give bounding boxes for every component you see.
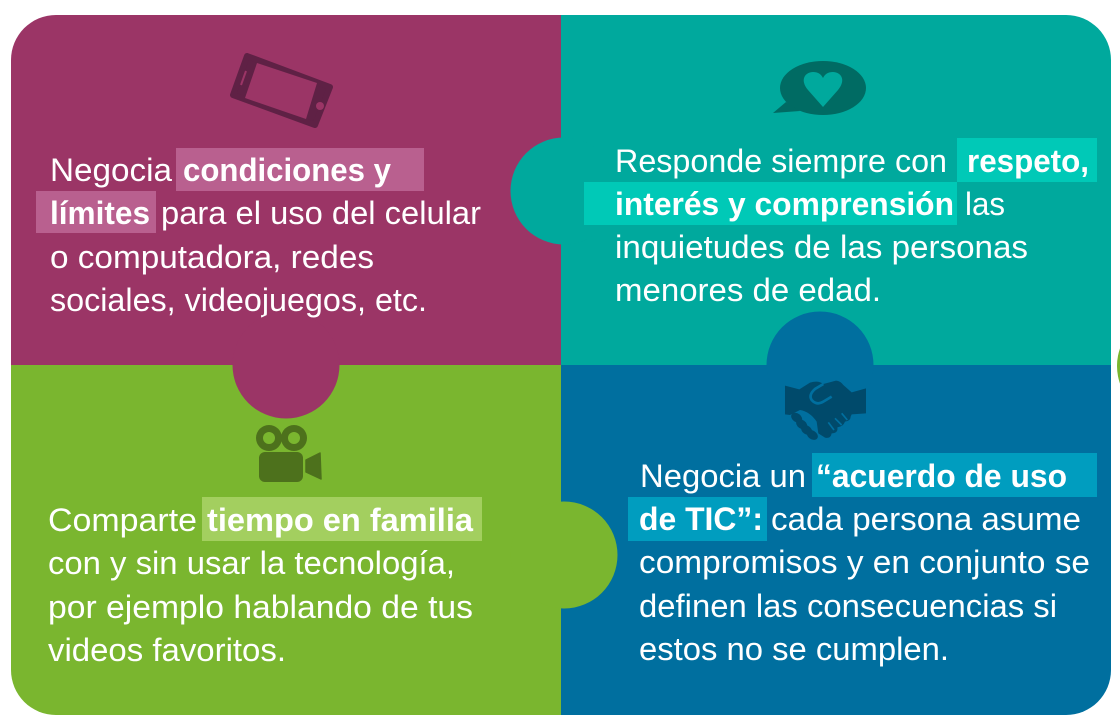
icon: handshake <box>785 381 866 442</box>
text block: green panel: por ejemplo hablando de tus <box>48 589 473 625</box>
text block: teal panel: menores de edad. <box>615 272 881 308</box>
text block: purple panel: sociales, videojuegos, etc. <box>50 282 427 318</box>
text block: blue panel: cada persona asume <box>771 501 1081 537</box>
highlight: respeto <box>957 138 1097 182</box>
text block: green panel: con y sin usar la tecnología, <box>48 545 455 581</box>
panel: purple, device limits <box>0 0 561 365</box>
text block: purple panel <box>50 152 481 318</box>
text block: teal panel: inquietudes de las personas <box>615 229 1028 265</box>
text block: green panel: tiempo en familia <box>207 502 473 538</box>
text block: blue panel: de TIC”: <box>639 501 763 537</box>
highlight: condiciones y <box>176 148 424 191</box>
highlight: de TIC <box>628 497 767 541</box>
text block: blue panel: “acuerdo de uso <box>816 458 1067 494</box>
panel: green, family time <box>0 365 618 724</box>
puzzle tab: green sliver at right edge <box>1117 313 1120 419</box>
highlight: acuerdo de uso <box>812 453 1097 497</box>
text block: purple panel: condiciones y <box>183 152 391 188</box>
text block: blue panel: definen las consecuencias si <box>639 588 1057 624</box>
text block: purple panel: para el uso del celular <box>161 195 481 231</box>
highlight: tiempo en familia <box>202 497 482 541</box>
panel: teal, respectful answers <box>510 0 1120 365</box>
text block: teal panel: Responde siempre con <box>615 143 947 179</box>
text block: purple panel: límites <box>50 195 150 231</box>
puzzle tab: purple <box>232 312 340 418</box>
text block: green panel: Comparte <box>48 502 197 538</box>
text block: purple panel: Negocia <box>50 152 172 188</box>
text block: teal panel <box>615 143 1089 308</box>
panel: blue, ICT agreement <box>561 312 1120 724</box>
highlight: interés y comprensión <box>584 182 957 225</box>
text block: blue panel <box>639 458 1090 667</box>
icon: speech bubble with heart <box>773 61 866 115</box>
text block: blue panel: Negocia un <box>640 458 806 494</box>
text block: teal panel: las <box>965 186 1005 222</box>
text block: teal panel: interés y comprensión <box>615 186 954 222</box>
text block: purple panel: o computadora, redes <box>50 239 374 275</box>
text block: teal panel: respeto, <box>967 143 1089 179</box>
highlight: límites <box>36 191 156 233</box>
text block: green panel: videos favoritos. <box>48 632 286 668</box>
icon: smartphone <box>233 56 330 125</box>
text block: green panel <box>48 502 473 668</box>
text block: blue panel: compromisos y en conjunto se <box>639 544 1090 580</box>
text block: blue panel: estos no se cumplen. <box>639 631 949 667</box>
icon: video camera <box>256 425 321 482</box>
